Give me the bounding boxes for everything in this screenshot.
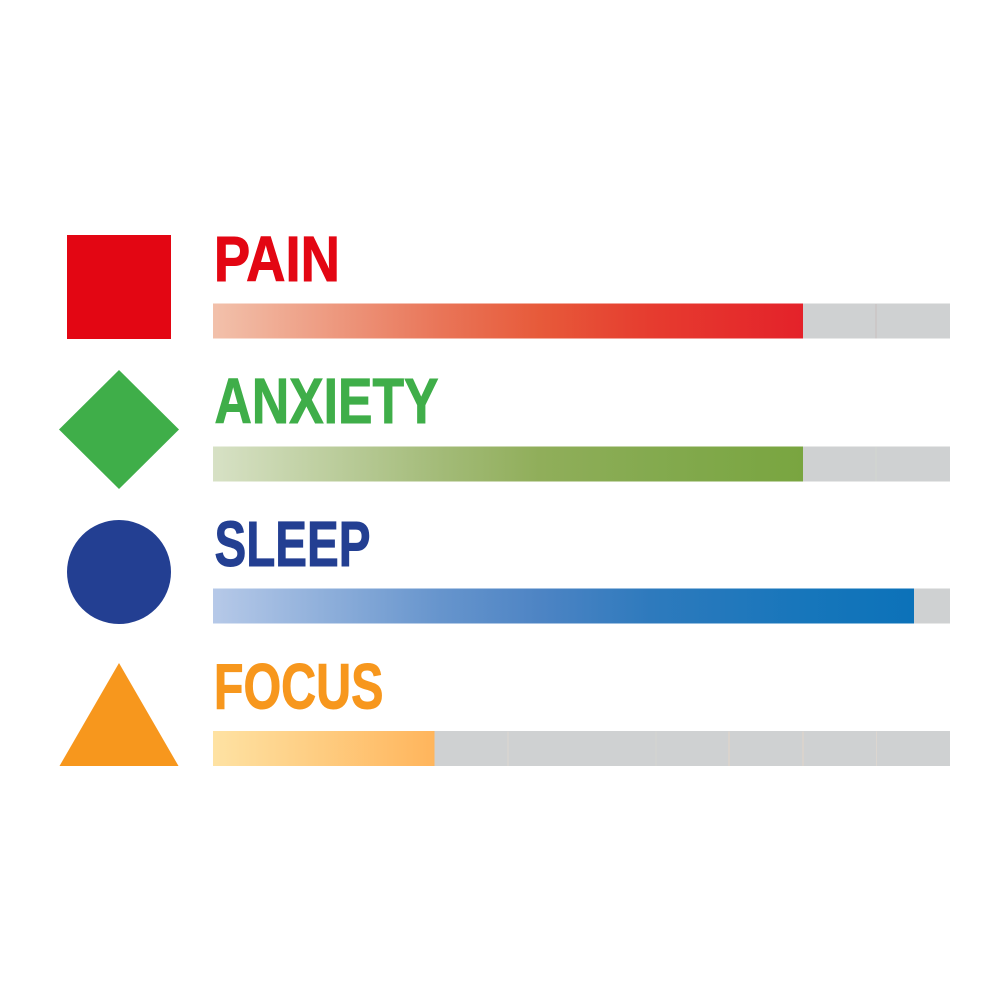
heading: pain: PAIN [214,223,340,295]
bar: anxiety [213,446,950,482]
heading: sleep: SLEEP [214,508,370,580]
bar: focus [213,731,950,766]
icon: orange triangle [60,663,178,766]
heading: anxiety: ANXIETY [214,365,438,437]
bar: sleep [213,588,950,624]
icon: red square [67,235,171,339]
icon: green diamond [59,370,179,489]
bar: pain [213,304,950,338]
heading: focus: FOCUS [214,650,384,722]
icon: blue circle [67,520,171,624]
